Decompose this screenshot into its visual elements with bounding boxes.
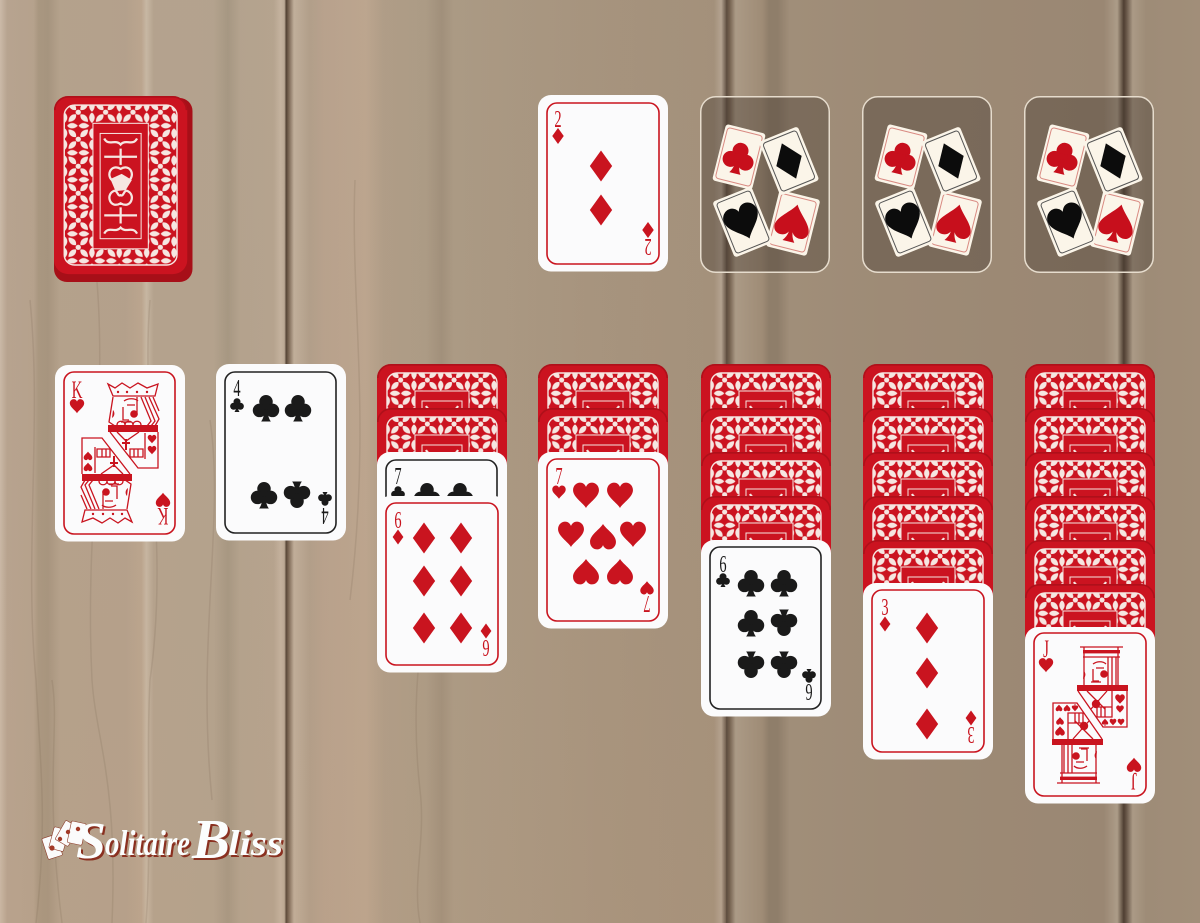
logo wordmark: B — [191, 809, 230, 871]
foundation slot 1 — [701, 97, 829, 272]
tableau column 1: king of hearts: K — [158, 502, 168, 529]
logo wordmark: S — [76, 813, 106, 870]
tableau column 2: 4 of clubs: 4 — [321, 502, 329, 529]
tableau column 6: five backs, 3 of diamonds — [863, 364, 993, 760]
tableau column 2: 4 of clubs: 4 — [233, 375, 241, 402]
tableau column 7: six backs, jack of hearts — [1025, 364, 1155, 804]
tableau column 5: four backs, 6 of clubs: 6 — [719, 551, 727, 578]
logo wordmark — [76, 809, 283, 871]
foundation slot 2 — [863, 97, 991, 272]
tableau column 4: two backs, 7 of hearts: 7 — [555, 463, 563, 490]
tableau column 2: 4 of clubs — [216, 364, 346, 540]
tableau column 3: two backs, 7 of clubs, 6 of diamonds: 6 — [482, 634, 490, 661]
waste card: 2 of diamonds — [538, 95, 668, 272]
tableau column 5: four backs, 6 of clubs: 6 — [805, 678, 813, 705]
tableau column 6: five backs, 3 of diamonds: 3 — [967, 721, 975, 748]
waste card: 2 of diamonds: 2 — [554, 106, 562, 133]
tableau column 3: two backs, 7 of clubs, 6 of diamonds — [377, 364, 507, 672]
tableau column 6: five backs, 3 of diamonds: 3 — [881, 594, 889, 621]
tableau column 1: king of hearts — [55, 365, 185, 542]
logo: Solitaire Bliss — [42, 809, 283, 871]
tableau column 7: six backs, jack of hearts: J — [1131, 767, 1137, 794]
tableau column 4: two backs, 7 of hearts: 7 — [643, 590, 651, 617]
logo icon: fan of cards — [42, 820, 86, 860]
foundation slot 3 — [1025, 97, 1153, 272]
tableau column 1: king of hearts: K — [72, 377, 82, 404]
waste card: 2 of diamonds: 2 — [644, 233, 652, 260]
tableau column 3: two backs, 7 of clubs, 6 of diamonds: 7 — [394, 463, 402, 490]
stock pile: face-down deck — [54, 96, 192, 282]
tableau column 3: two backs, 7 of clubs, 6 of diamonds: 6 — [394, 507, 402, 534]
tableau column 5: four backs, 6 of clubs — [701, 364, 831, 716]
logo wordmark: liss — [228, 823, 283, 863]
tableau column 4: two backs, 7 of hearts — [538, 364, 668, 628]
tableau column 7: six backs, jack of hearts: J — [1043, 636, 1049, 663]
logo wordmark: olitaire — [105, 823, 190, 863]
